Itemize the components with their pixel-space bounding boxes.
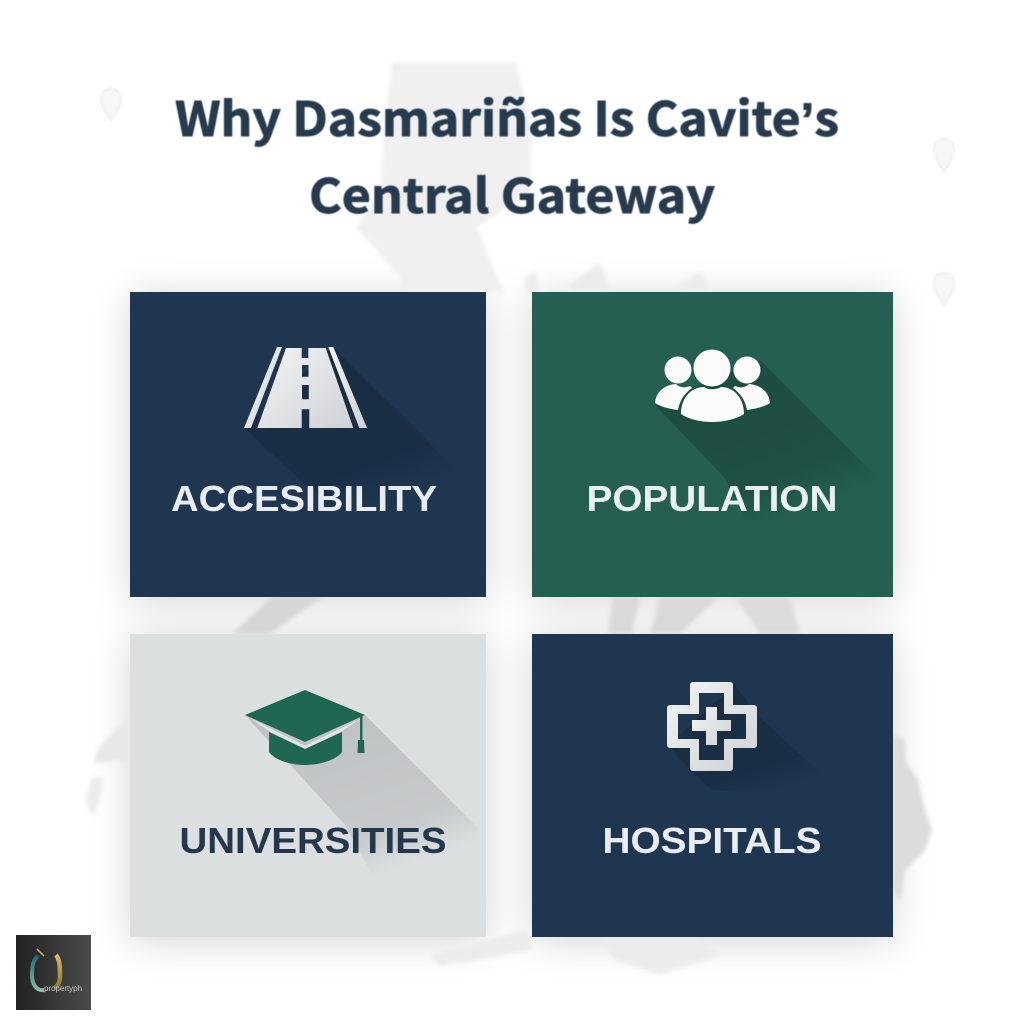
logo: propertyph	[16, 935, 91, 1010]
panel: hospitals	[532, 634, 893, 937]
label: hospitals: HOSPITALS	[602, 820, 822, 861]
title: Why Dasmariñas Is Cavite ’s	[175, 81, 839, 150]
logo: propertyph: propertyph	[44, 984, 82, 993]
icon: graduation cap	[245, 690, 365, 765]
icon shadow: road	[244, 347, 460, 512]
title	[175, 81, 839, 227]
card shadows	[130, 296, 893, 941]
icon shadow: cross	[668, 685, 837, 798]
label: accesibility: ACCESIBILITY	[171, 478, 437, 519]
decorative map pins	[101, 89, 954, 305]
icon shadow: cap	[245, 715, 480, 880]
label: universities: UNIVERSITIES	[180, 820, 446, 861]
panel: population	[532, 292, 893, 597]
panel: universities	[130, 634, 486, 937]
icon: medical cross	[667, 682, 757, 771]
background map silhouette	[85, 62, 932, 975]
icon shadow: people	[655, 360, 880, 520]
icon: road	[244, 347, 367, 428]
title: Central Gateway	[309, 158, 715, 227]
icon: people	[655, 350, 770, 422]
panel: accessibility	[130, 292, 486, 597]
label: population: POPULATION	[586, 478, 838, 519]
